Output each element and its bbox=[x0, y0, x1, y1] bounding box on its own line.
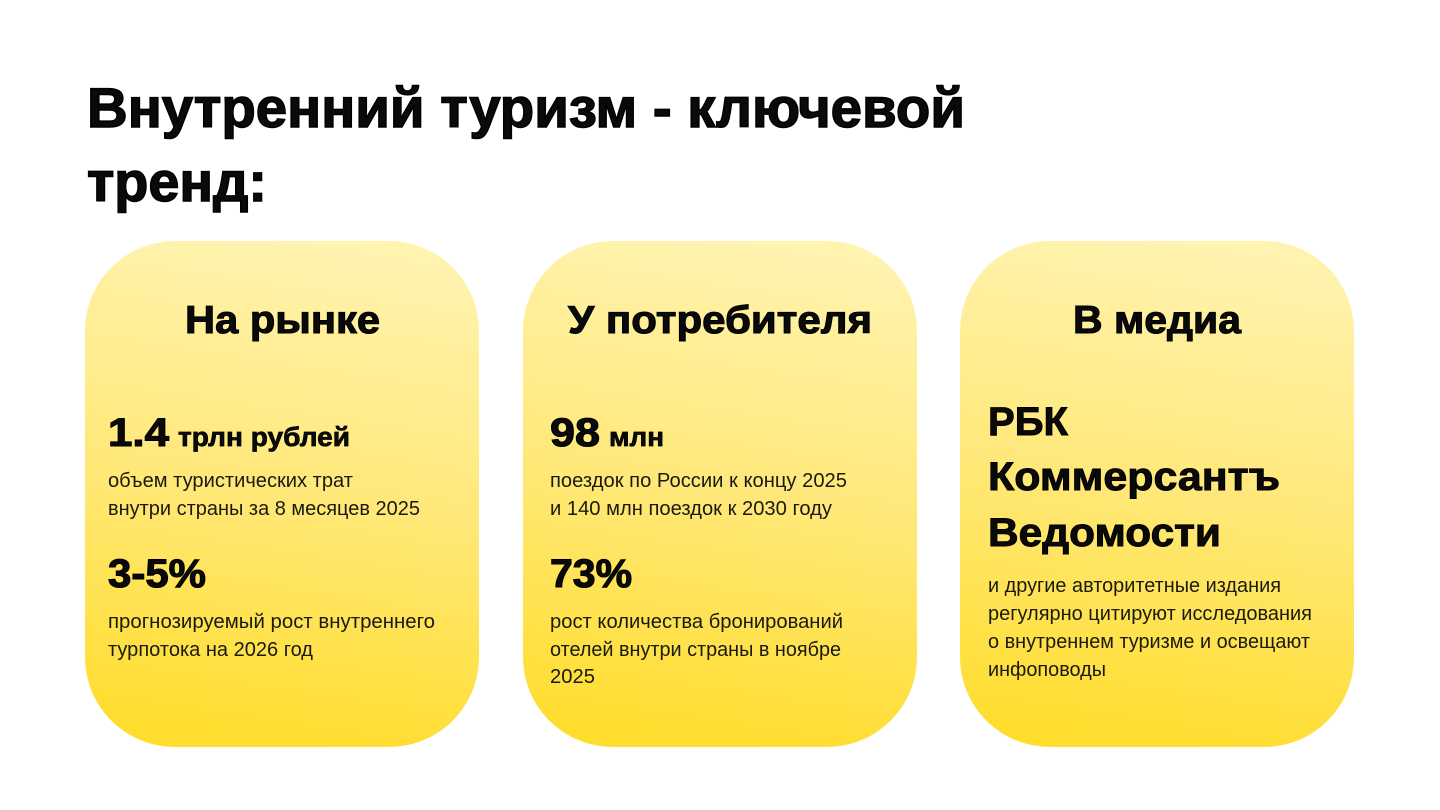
card background: у потребителя bbox=[523, 241, 917, 747]
media names list: Ведомости bbox=[988, 511, 1221, 555]
stat: 98 млн: 98 bbox=[550, 411, 600, 455]
text: и другие авторитетные издания bbox=[988, 575, 1312, 681]
panel: в медиа bbox=[960, 241, 1354, 747]
title: Внутренний туризм - ключевой bbox=[87, 76, 965, 139]
panel: у потребителя bbox=[523, 241, 917, 747]
stat: 98 млн bbox=[550, 411, 664, 455]
stat: 3-5%: 3-5% bbox=[108, 552, 206, 596]
text: рост количества бронирований bbox=[550, 611, 843, 688]
text: и другие авторитетные издания: инфоповоды bbox=[988, 659, 1106, 681]
stat: 1.4 трлн рублей: 1.4 bbox=[108, 411, 170, 455]
title: тренд: bbox=[87, 150, 267, 213]
text: поездок по России: поездок по России к концу 2025 bbox=[550, 470, 847, 492]
media names list bbox=[988, 400, 1280, 555]
text: объем туристических трат: внутри страны за 8 месяцев 2025 bbox=[108, 498, 420, 520]
heading: у потребителя: У потребителя bbox=[568, 299, 872, 342]
title bbox=[87, 76, 965, 213]
media names list: РБК bbox=[988, 400, 1069, 444]
panel: на рынке bbox=[85, 241, 479, 747]
card background: в медиа bbox=[960, 241, 1354, 747]
text: прогнозируемый рост bbox=[108, 611, 435, 661]
stat: 1.4 трлн рублей: трлн рублей bbox=[178, 422, 350, 452]
heading: на рынке: На рынке bbox=[185, 299, 380, 342]
text: объем туристических трат: объем туристических трат bbox=[108, 470, 353, 492]
stat: 73%: 73% bbox=[550, 552, 632, 596]
text: объем туристических трат bbox=[108, 470, 420, 520]
media names list: Коммерсантъ bbox=[988, 455, 1280, 499]
text: поездок по России: и 140 млн поездок к 2030 году bbox=[550, 498, 832, 520]
stat: 1.4 трлн рублей bbox=[108, 411, 350, 455]
text: рост количества бронирований: 2025 bbox=[550, 666, 595, 688]
text: прогнозируемый рост: прогнозируемый рост внутреннего bbox=[108, 611, 435, 633]
text: и другие авторитетные издания: регулярно цитируют исследования bbox=[988, 603, 1312, 625]
stat: 98 млн: млн bbox=[609, 422, 664, 452]
text: и другие авторитетные издания: о внутреннем туризме и освещают bbox=[988, 631, 1310, 653]
text: прогнозируемый рост: турпотока на 2026 год bbox=[108, 639, 313, 661]
text: рост количества бронирований: рост количества бронирований bbox=[550, 611, 843, 633]
text: рост количества бронирований: отелей внутри страны в ноябре bbox=[550, 639, 841, 661]
text: и другие авторитетные издания: и другие авторитетные издания bbox=[988, 575, 1281, 597]
card background: на рынке bbox=[85, 241, 479, 747]
heading: в медиа: В медиа bbox=[1073, 299, 1241, 342]
text: поездок по России bbox=[550, 470, 847, 520]
